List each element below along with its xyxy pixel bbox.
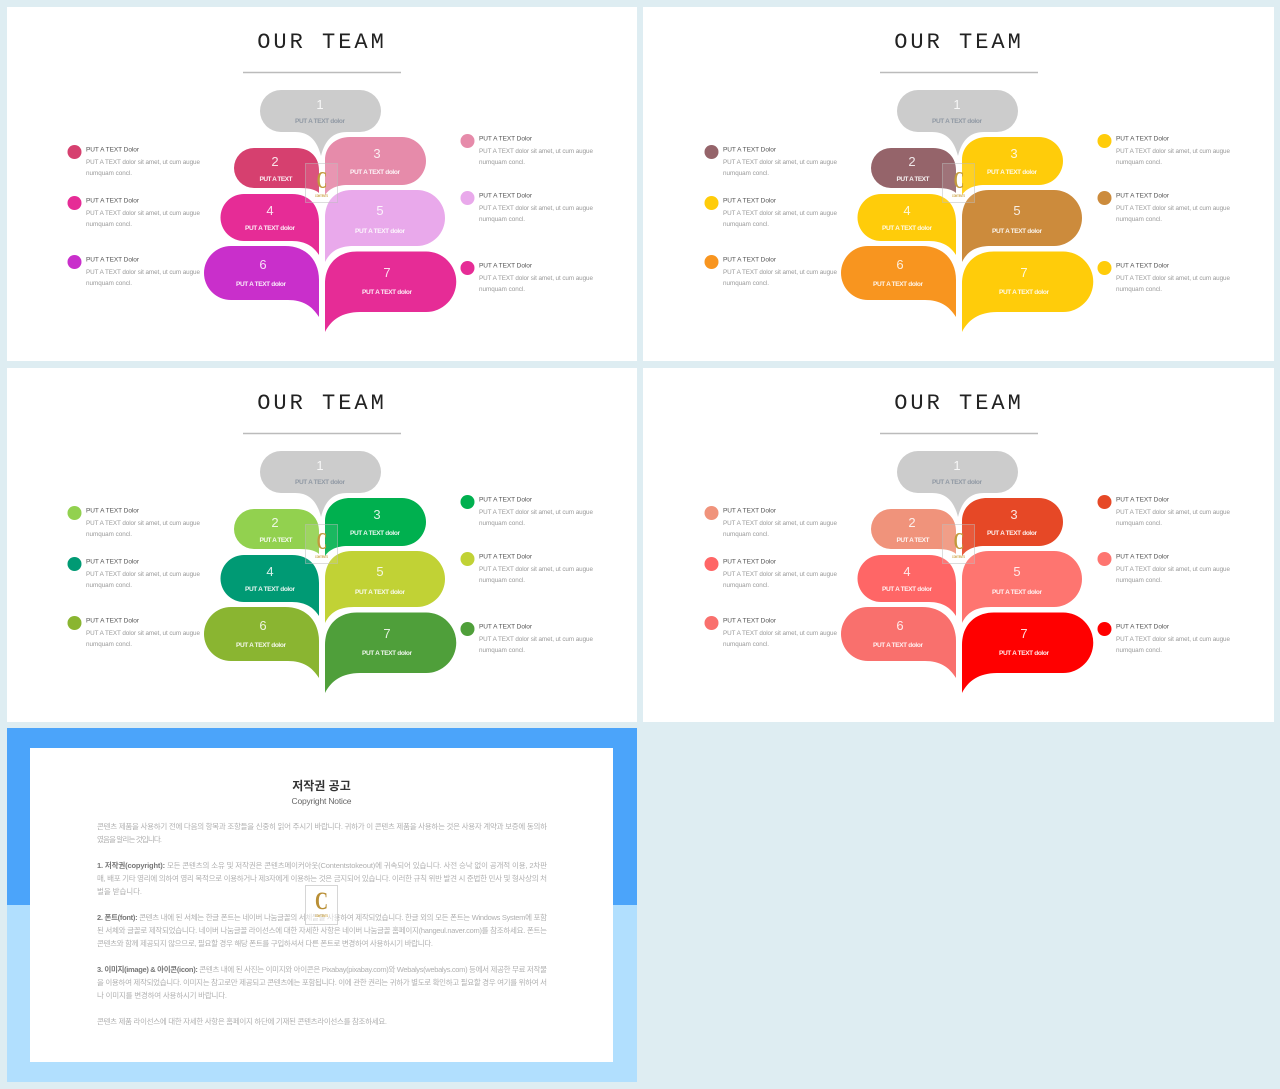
- petal 1: 1: [316, 458, 324, 473]
- legend right 2: PUT A TEXT dolor sit amet, ut cum augue: [479, 566, 593, 573]
- petal 7: PUT A TEXT dolor: [362, 289, 412, 296]
- legend left 1: numquam concl.: [723, 531, 769, 538]
- petal 5: [325, 190, 445, 262]
- petal 5: 5: [1013, 203, 1021, 218]
- panel: red team: [643, 368, 1274, 722]
- legend right 1: PUT A TEXT dolor sit amet, ut cum augue: [479, 509, 593, 516]
- legend right 1: PUT A TEXT Dolor: [1116, 496, 1170, 504]
- petal 4: 4: [903, 564, 911, 579]
- legend right 3: PUT A TEXT dolor sit amet, ut cum augue: [479, 275, 593, 282]
- legend right 3: PUT A TEXT Dolor: [479, 262, 533, 270]
- petal 2: [871, 509, 956, 554]
- watermark: [942, 524, 974, 564]
- watermark: CONTENTS: [315, 554, 328, 559]
- petal 1: PUT A TEXT dolor: [295, 479, 345, 486]
- image and icon paragraph: 나 이미지를 변경하여 사용하시기 바랍니다.: [97, 990, 227, 1000]
- petal 3: 3: [373, 507, 381, 522]
- legend left 3: numquam concl.: [723, 641, 769, 648]
- legend right 2: numquam concl.: [479, 577, 525, 584]
- legend left 3: [68, 255, 200, 287]
- petal 1: [260, 451, 381, 517]
- legend left 3: PUT A TEXT dolor sit amet, ut cum augue: [723, 269, 837, 276]
- petal 7: 7: [1020, 626, 1028, 641]
- legend right 2: [460, 552, 593, 584]
- legend left 3: PUT A TEXT Dolor: [723, 618, 777, 624]
- petal 5: 5: [376, 203, 384, 218]
- petal 1: 1: [316, 97, 324, 112]
- petal 1: 1: [953, 458, 961, 473]
- image and icon paragraph: [97, 964, 547, 1000]
- legend left 3: numquam concl.: [723, 280, 769, 287]
- petal 1: [260, 90, 381, 156]
- petal 2: 2: [271, 154, 279, 169]
- legend right 3: PUT A TEXT Dolor: [479, 624, 533, 630]
- legend right 3: numquam concl.: [1116, 286, 1162, 293]
- petal 2: [871, 148, 956, 193]
- petal 7: [325, 252, 456, 332]
- copyright subheading: Copyright Notice: [292, 796, 352, 806]
- petal 6: PUT A TEXT dolor: [873, 281, 923, 288]
- petal 5: 5: [1013, 564, 1021, 579]
- legend left 3: PUT A TEXT Dolor: [86, 256, 140, 264]
- petal 2: 2: [271, 515, 279, 530]
- intro paragraph: 였음을 알리는 것입니다.: [97, 834, 162, 844]
- watermark: C: [954, 528, 964, 555]
- petal 3: PUT A TEXT dolor: [987, 169, 1037, 176]
- legend left 3: PUT A TEXT dolor sit amet, ut cum augue: [723, 630, 837, 637]
- legend left 2: numquam concl.: [86, 582, 132, 589]
- legend left 2: PUT A TEXT dolor sit amet, ut cum augue: [723, 571, 837, 578]
- petal 6: 6: [896, 618, 904, 633]
- petal 6: [204, 607, 319, 678]
- legend right 3: PUT A TEXT dolor sit amet, ut cum augue: [1116, 636, 1230, 643]
- petal 2: [234, 509, 319, 554]
- legend right 3: PUT A TEXT Dolor: [1116, 262, 1170, 270]
- legend left 2: numquam concl.: [723, 582, 769, 589]
- petal 3: [962, 137, 1063, 195]
- closing line: 콘텐츠 제품 라이선스에 대한 자세한 사항은 홈페이지 하단에 기재된 콘텐츠라이선스를 참조하세요.: [97, 1016, 387, 1026]
- legend right 2: [1098, 191, 1230, 223]
- petal 4: [220, 194, 319, 255]
- legend left 2: [704, 557, 837, 589]
- legend left 1: PUT A TEXT Dolor: [86, 146, 140, 154]
- legend left 2: PUT A TEXT dolor sit amet, ut cum augue: [723, 210, 837, 217]
- copyright paragraph: 1. 저작권(copyright): 모든 콘텐츠의 소유 및 저작권은 콘텐츠메이커아웃(Contentstokeout)에 귀속되어 있습니다. 사전 승낙 없이 공개적 이용, 2차판: [97, 860, 547, 870]
- petal 4: [858, 555, 956, 616]
- petal 4: PUT A TEXT dolor: [245, 586, 295, 593]
- copyright paragraph: 벌을 받습니다.: [97, 886, 142, 896]
- copyright paragraph: [97, 860, 547, 896]
- petal 1: PUT A TEXT dolor: [932, 118, 982, 125]
- legend left 3: [68, 616, 200, 648]
- legend left 1: PUT A TEXT dolor sit amet, ut cum augue: [86, 159, 200, 166]
- font paragraph: 콘텐츠와 함께 제공되지 않으므로, 필요할 경우 해당 폰트를 구입하셔서 다른 폰트로 변경하여 사용하시기 바랍니다.: [97, 938, 433, 948]
- watermark: [306, 524, 338, 564]
- petal 6: [204, 246, 319, 317]
- legend left 3: [704, 255, 837, 287]
- image and icon paragraph: 을 이용하여 제작되었습니다. 이미지는 참고로만 제공되고 콘텐츠에는 포함됩니다. 이에 관한 권리는 귀하가 별도로 확인하고 필요할 경우 여기를 위하여 서: [97, 977, 547, 987]
- intro paragraph: 콘텐츠 제품을 사용하기 전에 다음의 항목과 조항들을 신중히 읽어 주시기 바랍니다. 귀하가 이 콘텐츠 제품을 사용하는 것은 사용자 계약과 보증에 동의하: [97, 821, 547, 831]
- legend left 2: PUT A TEXT Dolor: [86, 198, 140, 204]
- legend right 3: PUT A TEXT dolor sit amet, ut cum augue: [1116, 275, 1230, 282]
- petal 4: 4: [903, 203, 911, 218]
- legend right 1: [1098, 134, 1230, 166]
- watermark: [306, 886, 338, 924]
- legend left 1: PUT A TEXT dolor sit amet, ut cum augue: [723, 159, 837, 166]
- legend right 1: numquam concl.: [479, 520, 525, 527]
- legend right 1: [460, 134, 593, 166]
- legend right 2: [460, 191, 593, 223]
- petal 2: PUT A TEXT: [260, 176, 293, 183]
- panel: green team: [7, 368, 637, 722]
- petal 3: 3: [373, 146, 381, 161]
- legend right 1: PUT A TEXT dolor sit amet, ut cum augue: [1116, 509, 1230, 516]
- panel: yellow team: [643, 7, 1274, 361]
- petal 3: PUT A TEXT dolor: [350, 530, 400, 537]
- watermark: C: [315, 887, 328, 915]
- legend right 2: PUT A TEXT dolor sit amet, ut cum augue: [479, 205, 593, 212]
- legend right 1: PUT A TEXT Dolor: [479, 496, 533, 504]
- legend right 2: PUT A TEXT Dolor: [1116, 192, 1170, 200]
- legend right 2: [1098, 552, 1230, 584]
- font paragraph: [97, 912, 547, 948]
- watermark: CONTENTS: [315, 193, 328, 198]
- intro paragraph: [97, 821, 547, 844]
- petal 6: PUT A TEXT dolor: [236, 642, 286, 649]
- font paragraph: 2. 폰트(font): 콘텐츠 내에 된 서체는 한글 폰트는 네이버 나눔글꼴의 서체들을 사용하여 제작되었습니다. 한글 외의 모든 폰트는 Windows System에 포함: [97, 912, 547, 922]
- legend right 2: PUT A TEXT Dolor: [479, 192, 533, 200]
- legend left 3: PUT A TEXT dolor sit amet, ut cum augue: [86, 269, 200, 276]
- legend left 2: numquam concl.: [86, 221, 132, 228]
- legend left 1: PUT A TEXT Dolor: [723, 508, 777, 514]
- petal 1: [897, 90, 1018, 156]
- legend left 1: numquam concl.: [86, 531, 132, 538]
- watermark: C: [954, 167, 964, 194]
- watermark: CONTENTS: [952, 554, 965, 559]
- legend left 1: [704, 145, 837, 177]
- legend right 3: [460, 261, 593, 293]
- legend left 1: PUT A TEXT dolor sit amet, ut cum augue: [723, 520, 837, 527]
- legend left 1: PUT A TEXT dolor sit amet, ut cum augue: [86, 520, 200, 527]
- legend left 2: [68, 196, 200, 228]
- legend right 3: [1098, 261, 1230, 293]
- legend left 2: PUT A TEXT Dolor: [86, 558, 140, 566]
- legend left 2: [68, 557, 200, 589]
- petal 1: PUT A TEXT dolor: [932, 479, 982, 486]
- petal 6: 6: [259, 618, 267, 633]
- petal 3: PUT A TEXT dolor: [350, 169, 400, 176]
- petal 7: PUT A TEXT dolor: [999, 289, 1049, 296]
- petal 5: PUT A TEXT dolor: [355, 228, 405, 235]
- petal 7: [962, 612, 1093, 693]
- petal 7: [962, 252, 1093, 332]
- petal 7: [325, 612, 456, 693]
- legend left 1: [68, 506, 200, 538]
- petal 2: 2: [908, 515, 916, 530]
- panel: pink team: [7, 7, 637, 361]
- petal 3: [325, 137, 426, 195]
- petal 5: PUT A TEXT dolor: [992, 228, 1042, 235]
- font paragraph: 된 서체와 글꼴로 제작되었습니다. 네이버 나눔글꼴 라이선스에 대한 자세한 사항은 네이버 나눔글꼴 홈페이지(hangeul.naver.com)를 참조하세요. 폰트는: [97, 925, 547, 935]
- petal 4: [220, 555, 319, 616]
- petal 2: 2: [908, 154, 916, 169]
- watermark: [306, 164, 338, 202]
- petal 4: 4: [266, 203, 274, 218]
- watermark: C: [317, 528, 327, 555]
- legend right 2: PUT A TEXT Dolor: [479, 554, 533, 560]
- legend left 1: PUT A TEXT Dolor: [86, 508, 140, 514]
- legend left 2: PUT A TEXT dolor sit amet, ut cum augue: [86, 210, 200, 217]
- legend right 2: numquam concl.: [479, 216, 525, 223]
- legend right 3: PUT A TEXT dolor sit amet, ut cum augue: [479, 636, 593, 643]
- legend left 3: [704, 616, 837, 648]
- petal 5: [325, 551, 445, 623]
- petal 1: PUT A TEXT dolor: [295, 118, 345, 125]
- legend left 1: [68, 145, 200, 177]
- watermark: CONTENTS: [952, 193, 965, 198]
- legend right 1: numquam concl.: [1116, 159, 1162, 166]
- petal 3: [962, 498, 1063, 556]
- title: OUR TEAM: [894, 30, 1024, 55]
- legend right 3: [460, 622, 593, 654]
- legend right 3: numquam concl.: [479, 286, 525, 293]
- title: OUR TEAM: [894, 391, 1024, 416]
- legend right 2: PUT A TEXT Dolor: [1116, 554, 1170, 560]
- petal 5: [962, 551, 1082, 623]
- petal 1: 1: [953, 97, 961, 112]
- petal 5: PUT A TEXT dolor: [355, 589, 405, 596]
- petal 6: [841, 607, 956, 678]
- legend left 1: PUT A TEXT Dolor: [723, 146, 777, 154]
- legend right 1: numquam concl.: [1116, 520, 1162, 527]
- legend right 2: numquam concl.: [1116, 216, 1162, 223]
- legend right 3: numquam concl.: [1116, 647, 1162, 654]
- legend left 2: PUT A TEXT Dolor: [723, 558, 777, 566]
- legend left 3: PUT A TEXT Dolor: [86, 618, 140, 624]
- legend left 3: PUT A TEXT dolor sit amet, ut cum augue: [86, 630, 200, 637]
- petal 3: 3: [1010, 146, 1018, 161]
- petal 6: PUT A TEXT dolor: [236, 281, 286, 288]
- petal 6: [841, 246, 956, 317]
- legend right 2: numquam concl.: [1116, 577, 1162, 584]
- legend left 1: [704, 506, 837, 538]
- petal 5: 5: [376, 564, 384, 579]
- legend left 1: numquam concl.: [86, 170, 132, 177]
- watermark: CONTENTS: [315, 913, 328, 918]
- legend right 3: [1098, 622, 1230, 654]
- petal 7: PUT A TEXT dolor: [362, 650, 412, 657]
- copyright paragraph: 매, 배포 기타 영리에 의하여 영리 목적으로 이용하거나 제3자에게 이용하는 것은 금지되어 있습니다. 이러한 규칙 위반 발견 시 준법한 민사 및 형사상의 처: [97, 873, 547, 883]
- petal 6: 6: [896, 257, 904, 272]
- legend left 2: PUT A TEXT dolor sit amet, ut cum augue: [86, 571, 200, 578]
- watermark: [942, 164, 974, 202]
- petal 2: [234, 148, 319, 193]
- petal 3: PUT A TEXT dolor: [987, 530, 1037, 537]
- legend right 1: PUT A TEXT dolor sit amet, ut cum augue: [479, 148, 593, 155]
- legend right 2: PUT A TEXT dolor sit amet, ut cum augue: [1116, 205, 1230, 212]
- image and icon paragraph: 3. 이미지(image) & 아이콘(icon): 콘텐츠 내에 된 사진는 이미지와 아이콘은 Pixabay(pixabay.com)와 Webalys(webalys.com) 등에서 제공한 무료 저작물: [97, 964, 547, 974]
- legend right 2: PUT A TEXT dolor sit amet, ut cum augue: [1116, 566, 1230, 573]
- legend right 1: PUT A TEXT Dolor: [1116, 136, 1170, 142]
- title: OUR TEAM: [257, 391, 387, 416]
- legend right 1: numquam concl.: [479, 159, 525, 166]
- petal 3: [325, 498, 426, 556]
- petal 7: 7: [383, 265, 391, 280]
- legend left 2: numquam concl.: [723, 221, 769, 228]
- petal 2: PUT A TEXT: [896, 176, 930, 183]
- petal 6: 6: [259, 257, 267, 272]
- petal 1: [897, 451, 1018, 517]
- petal 4: PUT A TEXT dolor: [882, 586, 932, 593]
- petal 6: PUT A TEXT dolor: [873, 642, 923, 649]
- petal 2: PUT A TEXT: [896, 537, 930, 544]
- petal 2: PUT A TEXT: [260, 537, 293, 544]
- legend left 1: numquam concl.: [723, 170, 769, 177]
- legend right 3: PUT A TEXT Dolor: [1116, 624, 1170, 630]
- copyright heading: 저작권 공고: [292, 778, 351, 793]
- legend left 3: PUT A TEXT Dolor: [723, 256, 777, 264]
- legend right 1: [460, 495, 593, 527]
- legend left 3: numquam concl.: [86, 641, 132, 648]
- legend right 1: PUT A TEXT Dolor: [479, 136, 533, 142]
- legend right 1: PUT A TEXT dolor sit amet, ut cum augue: [1116, 148, 1230, 155]
- petal 4: PUT A TEXT dolor: [245, 225, 295, 232]
- legend right 1: [1098, 495, 1230, 527]
- legend left 2: [704, 196, 837, 228]
- petal 3: 3: [1010, 507, 1018, 522]
- panel: copyright notice: [7, 728, 637, 1082]
- legend right 3: numquam concl.: [479, 647, 525, 654]
- legend left 3: numquam concl.: [86, 280, 132, 287]
- legend left 2: PUT A TEXT Dolor: [723, 198, 777, 204]
- petal 4: PUT A TEXT dolor: [882, 225, 932, 232]
- petal 7: PUT A TEXT dolor: [999, 650, 1049, 657]
- petal 5: PUT A TEXT dolor: [992, 589, 1042, 596]
- petal 7: 7: [1020, 265, 1028, 280]
- petal 4: 4: [266, 564, 274, 579]
- petal 5: [962, 190, 1082, 262]
- title: OUR TEAM: [257, 30, 387, 55]
- petal 7: 7: [383, 626, 391, 641]
- watermark: C: [317, 167, 327, 194]
- petal 4: [858, 194, 956, 255]
